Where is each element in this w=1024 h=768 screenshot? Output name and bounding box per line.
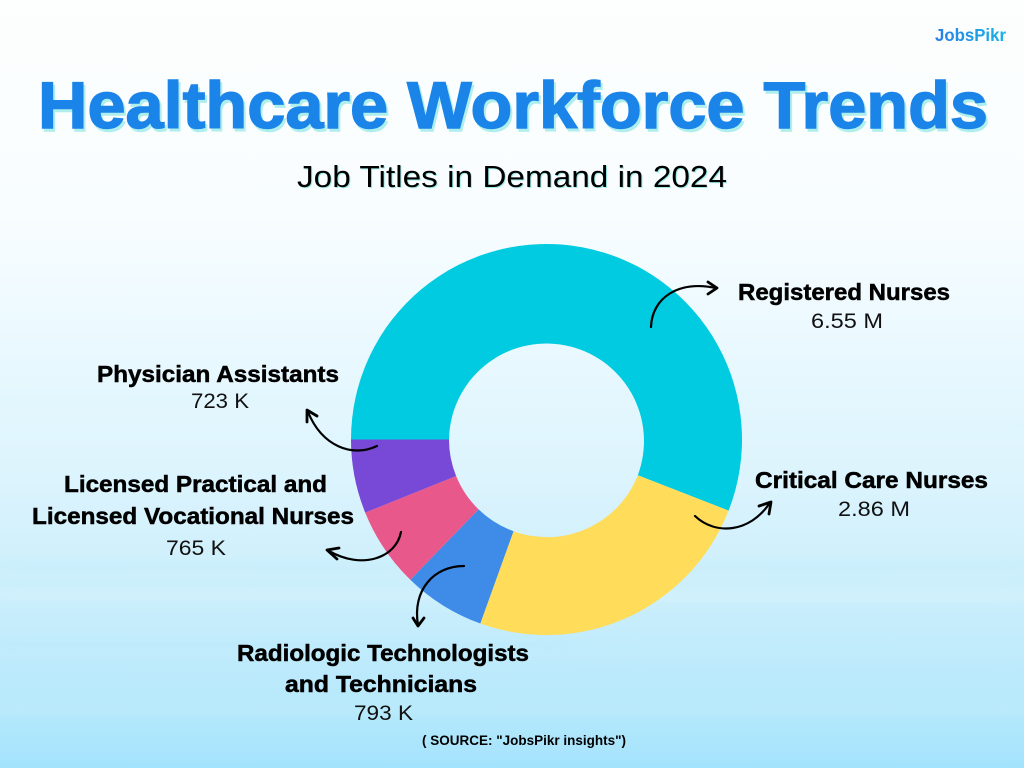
source note: ( SOURCE: "JobsPikr insights") <box>422 733 626 748</box>
label: Licensed Practical and Licensed Vocational Nurses <box>32 471 354 560</box>
segment: Physician Assistants <box>351 440 456 513</box>
segment: Radiologic Technologists and Technicians <box>410 509 514 624</box>
label: Licensed Practical and Licensed Vocational Nurses: Licensed Practical and <box>64 471 327 497</box>
label: Radiologic Technologists and Technicians <box>237 640 529 725</box>
arrow: Critical Care Nurses <box>695 502 771 528</box>
title: Healthcare Workforce Trends <box>40 71 990 145</box>
donut chart <box>351 244 742 635</box>
logo: JobsPikr: JobsPikr <box>935 25 1006 45</box>
segment: Licensed Practical and Licensed Vocational Nurses <box>365 476 479 580</box>
label: Critical Care Nurses <box>755 467 988 521</box>
label: Radiologic Technologists and Technicians: 793 K <box>354 701 414 725</box>
segment: Registered Nurses <box>351 244 742 511</box>
arrow: Registered Nurses <box>651 282 717 327</box>
label: Critical Care Nurses: Critical Care Nurses <box>755 467 988 493</box>
arrow: Radiologic Technologists and Technicians <box>413 566 464 626</box>
label: Physician Assistants: Physician Assistants <box>97 361 339 387</box>
label: Registered Nurses <box>738 279 950 333</box>
label: Physician Assistants: 723 K <box>191 389 250 413</box>
title: Healthcare Workforce Trends <box>38 68 988 142</box>
label: Radiologic Technologists and Technicians: Radiologic Technologists <box>237 640 529 666</box>
label: Licensed Practical and Licensed Vocational Nurses: Licensed Vocational Nurses <box>32 503 354 529</box>
subtitle: Job Titles in Demand in 2024 <box>297 159 727 194</box>
label: Physician Assistants <box>97 361 339 413</box>
arrow: Licensed Practical and Licensed Vocational Nurses <box>327 532 401 560</box>
label: Licensed Practical and Licensed Vocational Nurses: 765 K <box>166 536 227 560</box>
segment: Critical Care Nurses <box>480 475 729 635</box>
label: Registered Nurses: Registered Nurses <box>738 279 950 305</box>
label: Critical Care Nurses: 2.86 M <box>838 497 910 521</box>
label: Radiologic Technologists and Technicians: and Technicians <box>285 671 477 697</box>
arrow: Physician Assistants <box>307 410 377 451</box>
subtitle: Job Titles in Demand in 2024 <box>298 160 728 195</box>
label: Registered Nurses: 6.55 M <box>811 309 883 333</box>
